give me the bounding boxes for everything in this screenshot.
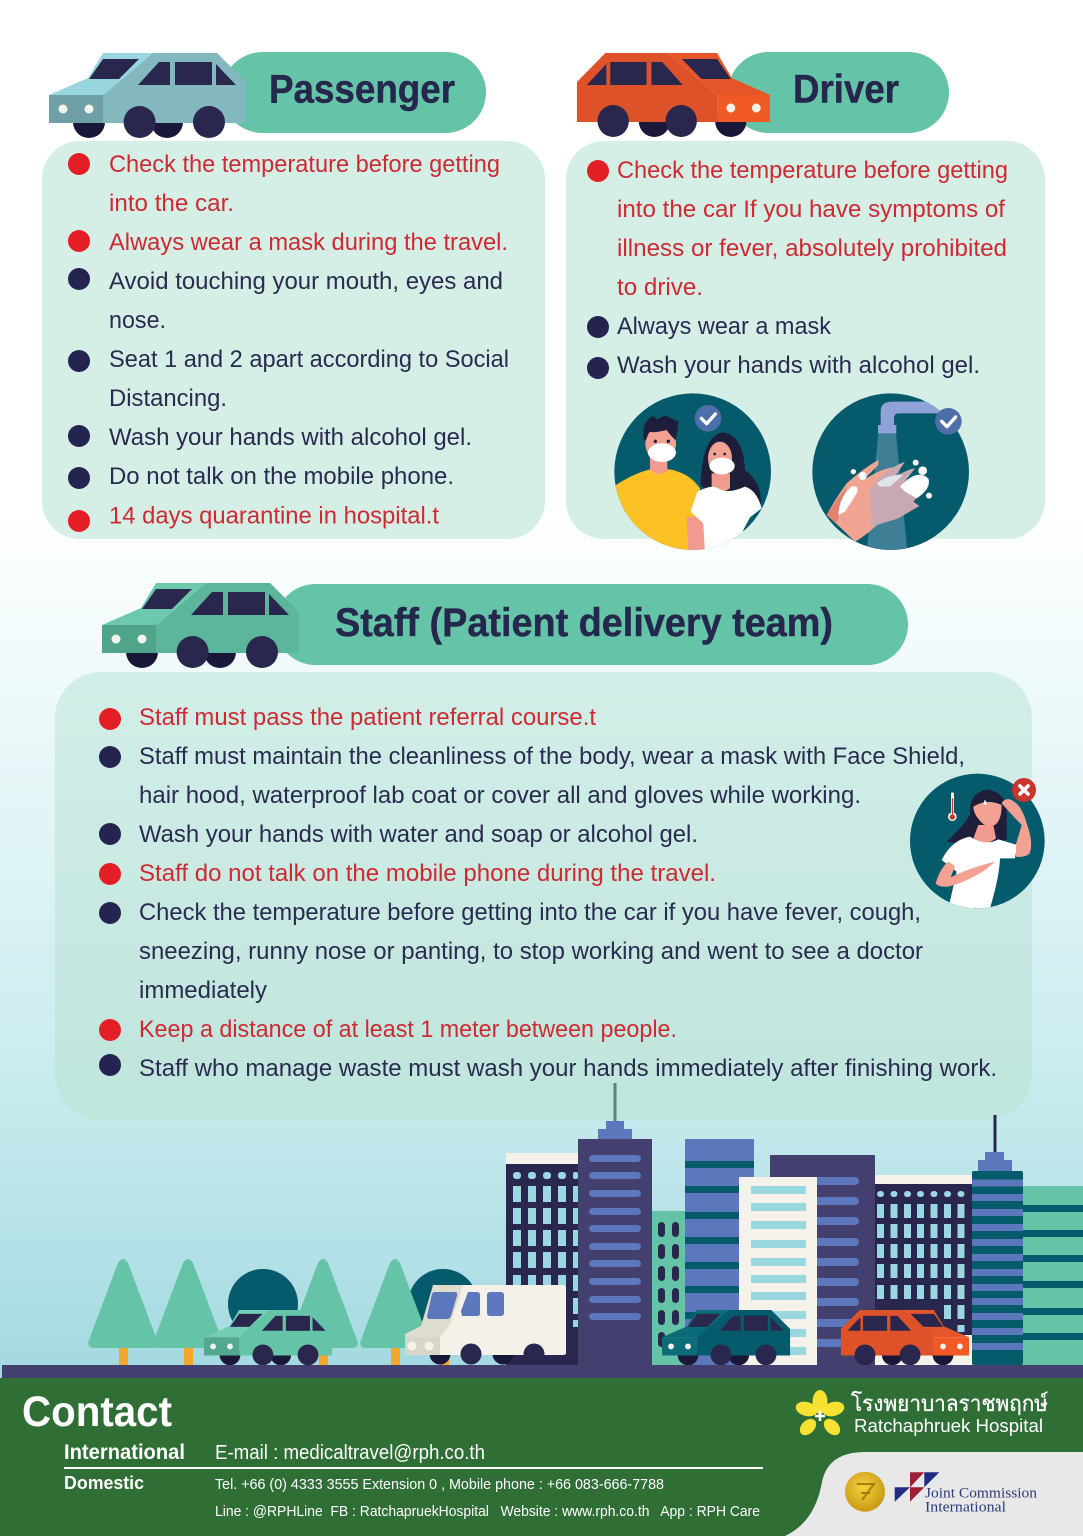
building: purple tower — [578, 1083, 652, 1365]
icon: green car — [102, 583, 299, 668]
international contact — [64, 1441, 485, 1464]
rule: staff temperature: sneezing, runny nose or panting, to stop working and went to see a doctor — [139, 938, 923, 965]
building: green small — [652, 1211, 686, 1365]
rule: quarantine: 14 days quarantine in hospital.t — [109, 502, 439, 530]
icon: gold seal — [845, 1472, 885, 1512]
icon: cream van — [405, 1285, 566, 1364]
heading: passenger — [222, 52, 486, 133]
rule: distance: Keep a distance of at least 1 meter between people. — [139, 1016, 677, 1043]
domestic contact: Tel. +66 (0) 4333 3555 Extension 0 , Mobile phone : +66 083-666-7788 — [215, 1476, 664, 1493]
rule: driver wash hands: Wash your hands with alcohol gel. — [617, 352, 980, 379]
rule: check temperature — [68, 151, 500, 217]
rule: avoid touching: Avoid touching your mouth, eyes and — [109, 268, 503, 295]
icon: couple wearing masks — [613, 393, 771, 553]
building: purple wide — [770, 1155, 875, 1365]
icon: small green car — [204, 1310, 332, 1365]
international contact: E-mail : medicaltravel@rph.co.th — [215, 1442, 485, 1464]
international contact: International — [64, 1441, 185, 1464]
heading: driver — [728, 52, 949, 133]
rule: check temperature: into the car. — [109, 190, 234, 217]
icon: check badge — [935, 408, 962, 435]
rule: driver temperature: into the car If you have symptoms of — [617, 196, 1005, 223]
rule: staff temperature: immediately — [139, 977, 267, 1004]
heading: passenger: Passenger — [269, 68, 455, 112]
rule: seating — [68, 346, 509, 412]
icon: joint commission logo: International — [925, 1500, 1006, 1516]
accreditation panel — [785, 1452, 1083, 1536]
panel: staff — [55, 583, 1045, 1120]
rule: staff temperature — [99, 899, 923, 1004]
icon: small teal car — [662, 1310, 790, 1365]
rule: wear a mask: Always wear a mask during the travel. — [109, 229, 508, 256]
building: dark windows left — [506, 1153, 578, 1365]
heading: driver: Driver — [793, 68, 899, 112]
icon: thermometer — [948, 792, 957, 821]
rule: avoid touching: nose. — [109, 307, 166, 334]
rule: waste: Staff who manage waste must wash your hands immediately after finishing work. — [139, 1055, 997, 1082]
rule: driver temperature: to drive. — [617, 274, 703, 301]
rule: cleanliness: hair hood, waterproof lab coat or cover all and gloves while working. — [139, 782, 861, 809]
rule: seating: Distancing. — [109, 385, 227, 412]
icon: yellow orchid — [794, 1390, 846, 1438]
building: green right — [1023, 1186, 1083, 1365]
domestic contact — [64, 1473, 760, 1520]
panel: passenger — [42, 52, 545, 539]
contact heading: Contact — [22, 1388, 172, 1436]
trees — [88, 1259, 478, 1365]
rule: check temperature: Check the temperature before getting — [109, 151, 500, 178]
icon: woman with fever — [910, 774, 1045, 908]
rule: wash hands: Wash your hands with alcohol gel. — [109, 424, 472, 451]
building: dark windows right — [875, 1175, 972, 1365]
icon: joint commission logo: Joint Commission — [925, 1486, 1038, 1502]
icon: small orange car — [841, 1310, 969, 1365]
hospital logo: โรงพยาบาลราชพฤกษ์ — [851, 1391, 1048, 1416]
building: blue striped — [685, 1139, 754, 1365]
icon: washing hands under tap — [812, 393, 969, 552]
rule: staff no phone: Staff do not talk on the mobile phone during the travel. — [139, 860, 716, 887]
illustration: city skyline — [2, 1083, 1083, 1378]
icon: joint commission logo — [895, 1472, 1038, 1516]
panel: driver — [566, 52, 1045, 553]
building: cream striped — [739, 1177, 817, 1365]
hospital logo — [794, 1390, 1048, 1438]
icon: blue car — [49, 53, 246, 138]
rule: staff wash hands: Wash your hands with water and soap or alcohol gel. — [139, 821, 698, 848]
footer: contact — [0, 1378, 1083, 1536]
rule: avoid touching — [68, 268, 503, 334]
rule: cleanliness: Staff must maintain the cleanliness of the body, wear a mask with Face Shield, — [139, 743, 965, 770]
rule: driver temperature: illness or fever, absolutely prohibited — [617, 235, 1007, 262]
heading: staff: Staff (Patient delivery team) — [335, 601, 833, 645]
rule: cleanliness — [99, 743, 965, 809]
rule: referral course: Staff must pass the patient referral course.t — [139, 704, 596, 731]
hospital logo: Ratchaphruek Hospital — [854, 1416, 1043, 1436]
rule: seating: Seat 1 and 2 apart according to Social — [109, 346, 509, 373]
domestic contact: Line : @RPHLine FB : RatchapruekHospital Website : www.rph.co.th App : RPH Care — [215, 1503, 760, 1520]
rule: driver mask: Always wear a mask — [617, 313, 832, 340]
icon: cross badge — [1012, 778, 1036, 802]
road — [2, 1365, 1083, 1378]
rule: driver temperature: Check the temperature before getting — [617, 157, 1008, 184]
building: teal tower — [972, 1115, 1023, 1365]
rule: driver temperature — [587, 157, 1008, 301]
icon: orange car — [577, 53, 770, 137]
icon: check badge — [695, 405, 721, 432]
heading: staff — [275, 584, 908, 665]
rule: no phone: Do not talk on the mobile phone. — [109, 463, 454, 490]
rule: staff temperature: Check the temperature before getting into the car if you have fever, cough, — [139, 899, 921, 926]
domestic contact: Domestic — [64, 1473, 144, 1493]
